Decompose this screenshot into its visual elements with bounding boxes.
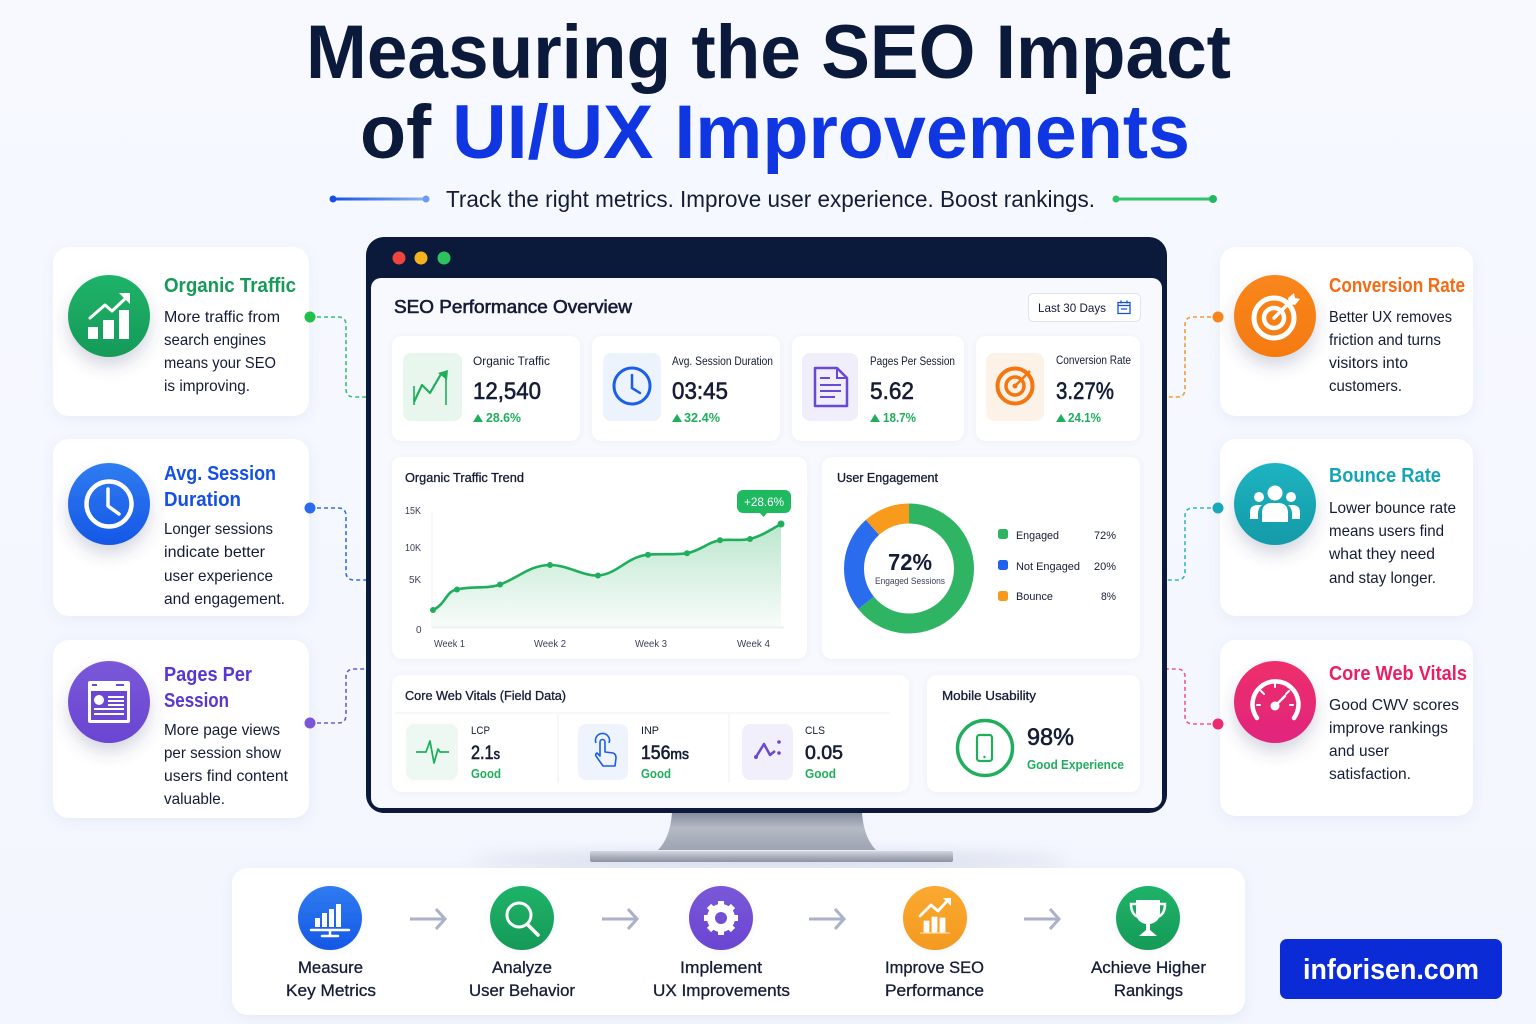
heading: Organic Traffic — [164, 275, 296, 297]
donut chart: Engaged Sessions — [875, 576, 945, 586]
text block: Longer sessions — [164, 521, 273, 538]
icon: users — [1234, 463, 1316, 545]
text block: means your SEO — [164, 355, 276, 372]
text block: Good CWV scores — [1329, 697, 1459, 714]
panel: conversion rate — [1220, 247, 1473, 416]
subtitle: Track the right metrics. Improve user experience. Boost rankings. — [446, 186, 1095, 212]
arrow — [410, 909, 445, 929]
metric: CLS: CLS — [805, 725, 825, 737]
heading: Bounce Rate — [1329, 465, 1441, 487]
title: of UI/UX Improvements — [360, 90, 1190, 175]
metric card: pages per session — [792, 336, 964, 441]
text block: per session show — [164, 745, 281, 762]
heading — [164, 463, 276, 511]
text block: users find content — [164, 768, 289, 785]
metric: CLS — [742, 724, 843, 781]
panel: bounce rate — [1220, 439, 1473, 616]
metric card: conversion rate: 3.27% — [1056, 378, 1114, 405]
panel: mobile usability: 98% — [1027, 724, 1074, 751]
metric card: organic traffic: 12,540 — [473, 378, 541, 405]
connector: bounce rate — [1167, 502, 1224, 580]
text block — [1329, 309, 1452, 395]
panel: process steps — [232, 868, 1245, 1015]
step: implement ux improvements: Implement — [680, 958, 762, 977]
heading: Pages Per — [164, 664, 252, 686]
dashboard heading: SEO Performance Overview — [394, 296, 633, 317]
text block: Better UX removes — [1329, 309, 1452, 326]
panel: pages per session — [53, 640, 309, 818]
metric card: session duration: 32.4% — [684, 411, 720, 425]
legend: Not Engaged — [1016, 561, 1080, 573]
step: implement ux improvements: UX Improvements — [653, 981, 790, 1000]
text block — [1329, 697, 1459, 783]
axis labels: Week 3 — [635, 639, 667, 650]
icon: phone in ring — [958, 720, 1012, 776]
connector: core web vitals — [1167, 669, 1224, 730]
brand badge: inforisen.com — [1303, 954, 1479, 986]
metric card: organic traffic: 28.6% — [486, 411, 521, 425]
text block: friction and turns — [1329, 332, 1441, 349]
icon: trend line — [403, 353, 462, 421]
heading: Session — [164, 690, 229, 712]
metric: INP: 156ms — [641, 743, 689, 764]
metric card: pages per session: Pages Per Session — [870, 356, 955, 368]
icon: target — [1234, 275, 1316, 357]
donut chart — [854, 514, 964, 624]
metric: INP — [578, 724, 689, 781]
connector: session duration — [304, 502, 367, 580]
text block: customers. — [1329, 378, 1402, 395]
step: measure key metrics — [286, 886, 376, 1000]
text block: visitors into — [1329, 355, 1408, 372]
text block: Lower bounce rate — [1329, 500, 1456, 517]
text block: is improving. — [164, 378, 250, 395]
panel: mobile usability — [927, 675, 1140, 792]
legend: 72% — [1094, 530, 1116, 542]
icon: browser window — [68, 661, 150, 743]
heading: Conversion Rate — [1329, 275, 1465, 297]
metric card: pages per session: 5.62 — [870, 378, 914, 405]
legend: 8% — [1101, 591, 1116, 603]
text block: means users find — [1329, 523, 1444, 540]
panel: user engagement: User Engagement — [837, 471, 939, 485]
text block: search engines — [164, 332, 266, 349]
date filter: Last 30 Days — [1038, 301, 1106, 315]
badge — [737, 490, 791, 517]
heading: Core Web Vitals — [1329, 663, 1467, 685]
text block: indicate better — [164, 544, 266, 561]
icon: clock — [68, 463, 150, 545]
title: Measuring the SEO Impact — [306, 10, 1231, 95]
legend: Engaged — [1016, 530, 1059, 542]
metric: LCP: Good — [471, 767, 501, 781]
metric: LCP: LCP — [471, 725, 490, 737]
legend: Bounce — [1016, 591, 1053, 603]
heading: Avg. Session — [164, 463, 276, 485]
panel: mobile usability: Good Experience — [1027, 758, 1124, 772]
text block: improve rankings — [1329, 720, 1448, 737]
title — [306, 10, 1231, 175]
metric card: session duration — [592, 336, 780, 441]
step: analyze user behavior — [469, 886, 575, 1000]
heading — [164, 664, 252, 712]
icon: clock — [603, 353, 661, 421]
icon: gauge — [1234, 661, 1316, 743]
panel: core web vitals field data — [392, 675, 909, 792]
arrow — [1024, 909, 1059, 929]
step: measure key metrics: Measure — [298, 958, 363, 977]
panel: core web vitals — [1220, 640, 1473, 816]
metric card: organic traffic — [392, 336, 580, 441]
step: analyze user behavior: User Behavior — [469, 981, 575, 1000]
monitor stand — [470, 813, 1070, 866]
step: achieve higher rankings: Rankings — [1114, 981, 1183, 1000]
badge: +28.6% — [744, 497, 784, 509]
axis labels: 5K — [409, 575, 421, 586]
text block: what they need — [1328, 546, 1435, 563]
axis labels — [405, 506, 770, 650]
arrow — [809, 909, 844, 929]
metric card: pages per session: 18.7% — [883, 411, 916, 425]
text block: satisfaction. — [1329, 766, 1411, 783]
metric: INP: INP — [641, 725, 659, 737]
text block: and engagement. — [164, 591, 285, 608]
metric: CLS: Good — [805, 767, 836, 781]
step: improve seo performance — [885, 886, 984, 1000]
metric: CLS: 0.05 — [805, 743, 843, 764]
axis labels: Week 2 — [534, 639, 566, 650]
text block — [164, 722, 289, 808]
metric: INP: Good — [641, 767, 671, 781]
axis labels: 10K — [405, 543, 421, 554]
step: achieve higher rankings — [1091, 886, 1206, 1000]
legend — [998, 529, 1116, 603]
axis labels: Week 1 — [434, 639, 465, 650]
arrow — [602, 909, 637, 929]
step: implement ux improvements — [653, 886, 790, 1000]
connector: organic traffic — [304, 312, 367, 397]
text block: user experience — [164, 568, 273, 585]
panel: mobile usability: Mobile Usability — [942, 689, 1037, 703]
legend: 20% — [1094, 561, 1116, 573]
connector: pages per session — [304, 669, 367, 728]
line chart — [405, 490, 791, 650]
metric card: session duration: 03:45 — [672, 378, 728, 405]
metric: LCP: 2.1s — [471, 743, 500, 764]
text block — [164, 521, 285, 608]
metric card: conversion rate: Conversion Rate — [1056, 355, 1131, 367]
text block: valuable. — [164, 791, 225, 808]
brand badge — [1280, 939, 1502, 999]
panel: avg session duration — [53, 439, 309, 616]
metric card: organic traffic: Organic Traffic — [473, 356, 550, 368]
date filter — [1028, 294, 1140, 322]
step: measure key metrics: Key Metrics — [286, 981, 376, 1000]
text block: More page views — [164, 722, 280, 739]
metric: LCP — [406, 724, 501, 781]
icon: growth chart — [68, 275, 150, 357]
monitor — [366, 237, 1167, 813]
metric card: session duration: Avg. Session Duration — [672, 356, 773, 368]
panel: organic traffic trend — [392, 457, 807, 659]
heading: Duration — [164, 489, 241, 511]
axis labels: 15K — [405, 506, 421, 517]
text block: and user — [1329, 743, 1390, 760]
metric card: conversion rate — [976, 336, 1140, 441]
axis labels: 0 — [416, 625, 422, 636]
text block: More traffic from — [164, 309, 280, 326]
panel: core web vitals field data: Core Web Vitals (Field Data) — [405, 689, 566, 703]
text block — [164, 309, 280, 395]
donut chart: 72% — [888, 549, 932, 575]
metric card: conversion rate: 24.1% — [1068, 411, 1101, 425]
text block — [1328, 500, 1456, 587]
step: improve seo performance: Performance — [885, 981, 984, 1000]
text block: and stay longer. — [1329, 570, 1436, 587]
icon: document — [802, 353, 858, 421]
icon: target — [986, 353, 1044, 421]
step: improve seo performance: Improve SEO — [885, 958, 984, 977]
panel: user engagement — [822, 457, 1140, 659]
panel: organic traffic — [53, 247, 309, 416]
axis labels: Week 4 — [737, 639, 770, 650]
panel: organic traffic trend: Organic Traffic Trend — [405, 471, 524, 485]
window controls — [392, 252, 450, 264]
connector: conversion rate — [1167, 312, 1224, 397]
step: achieve higher rankings: Achieve Higher — [1091, 958, 1206, 977]
step: analyze user behavior: Analyze — [492, 958, 552, 977]
